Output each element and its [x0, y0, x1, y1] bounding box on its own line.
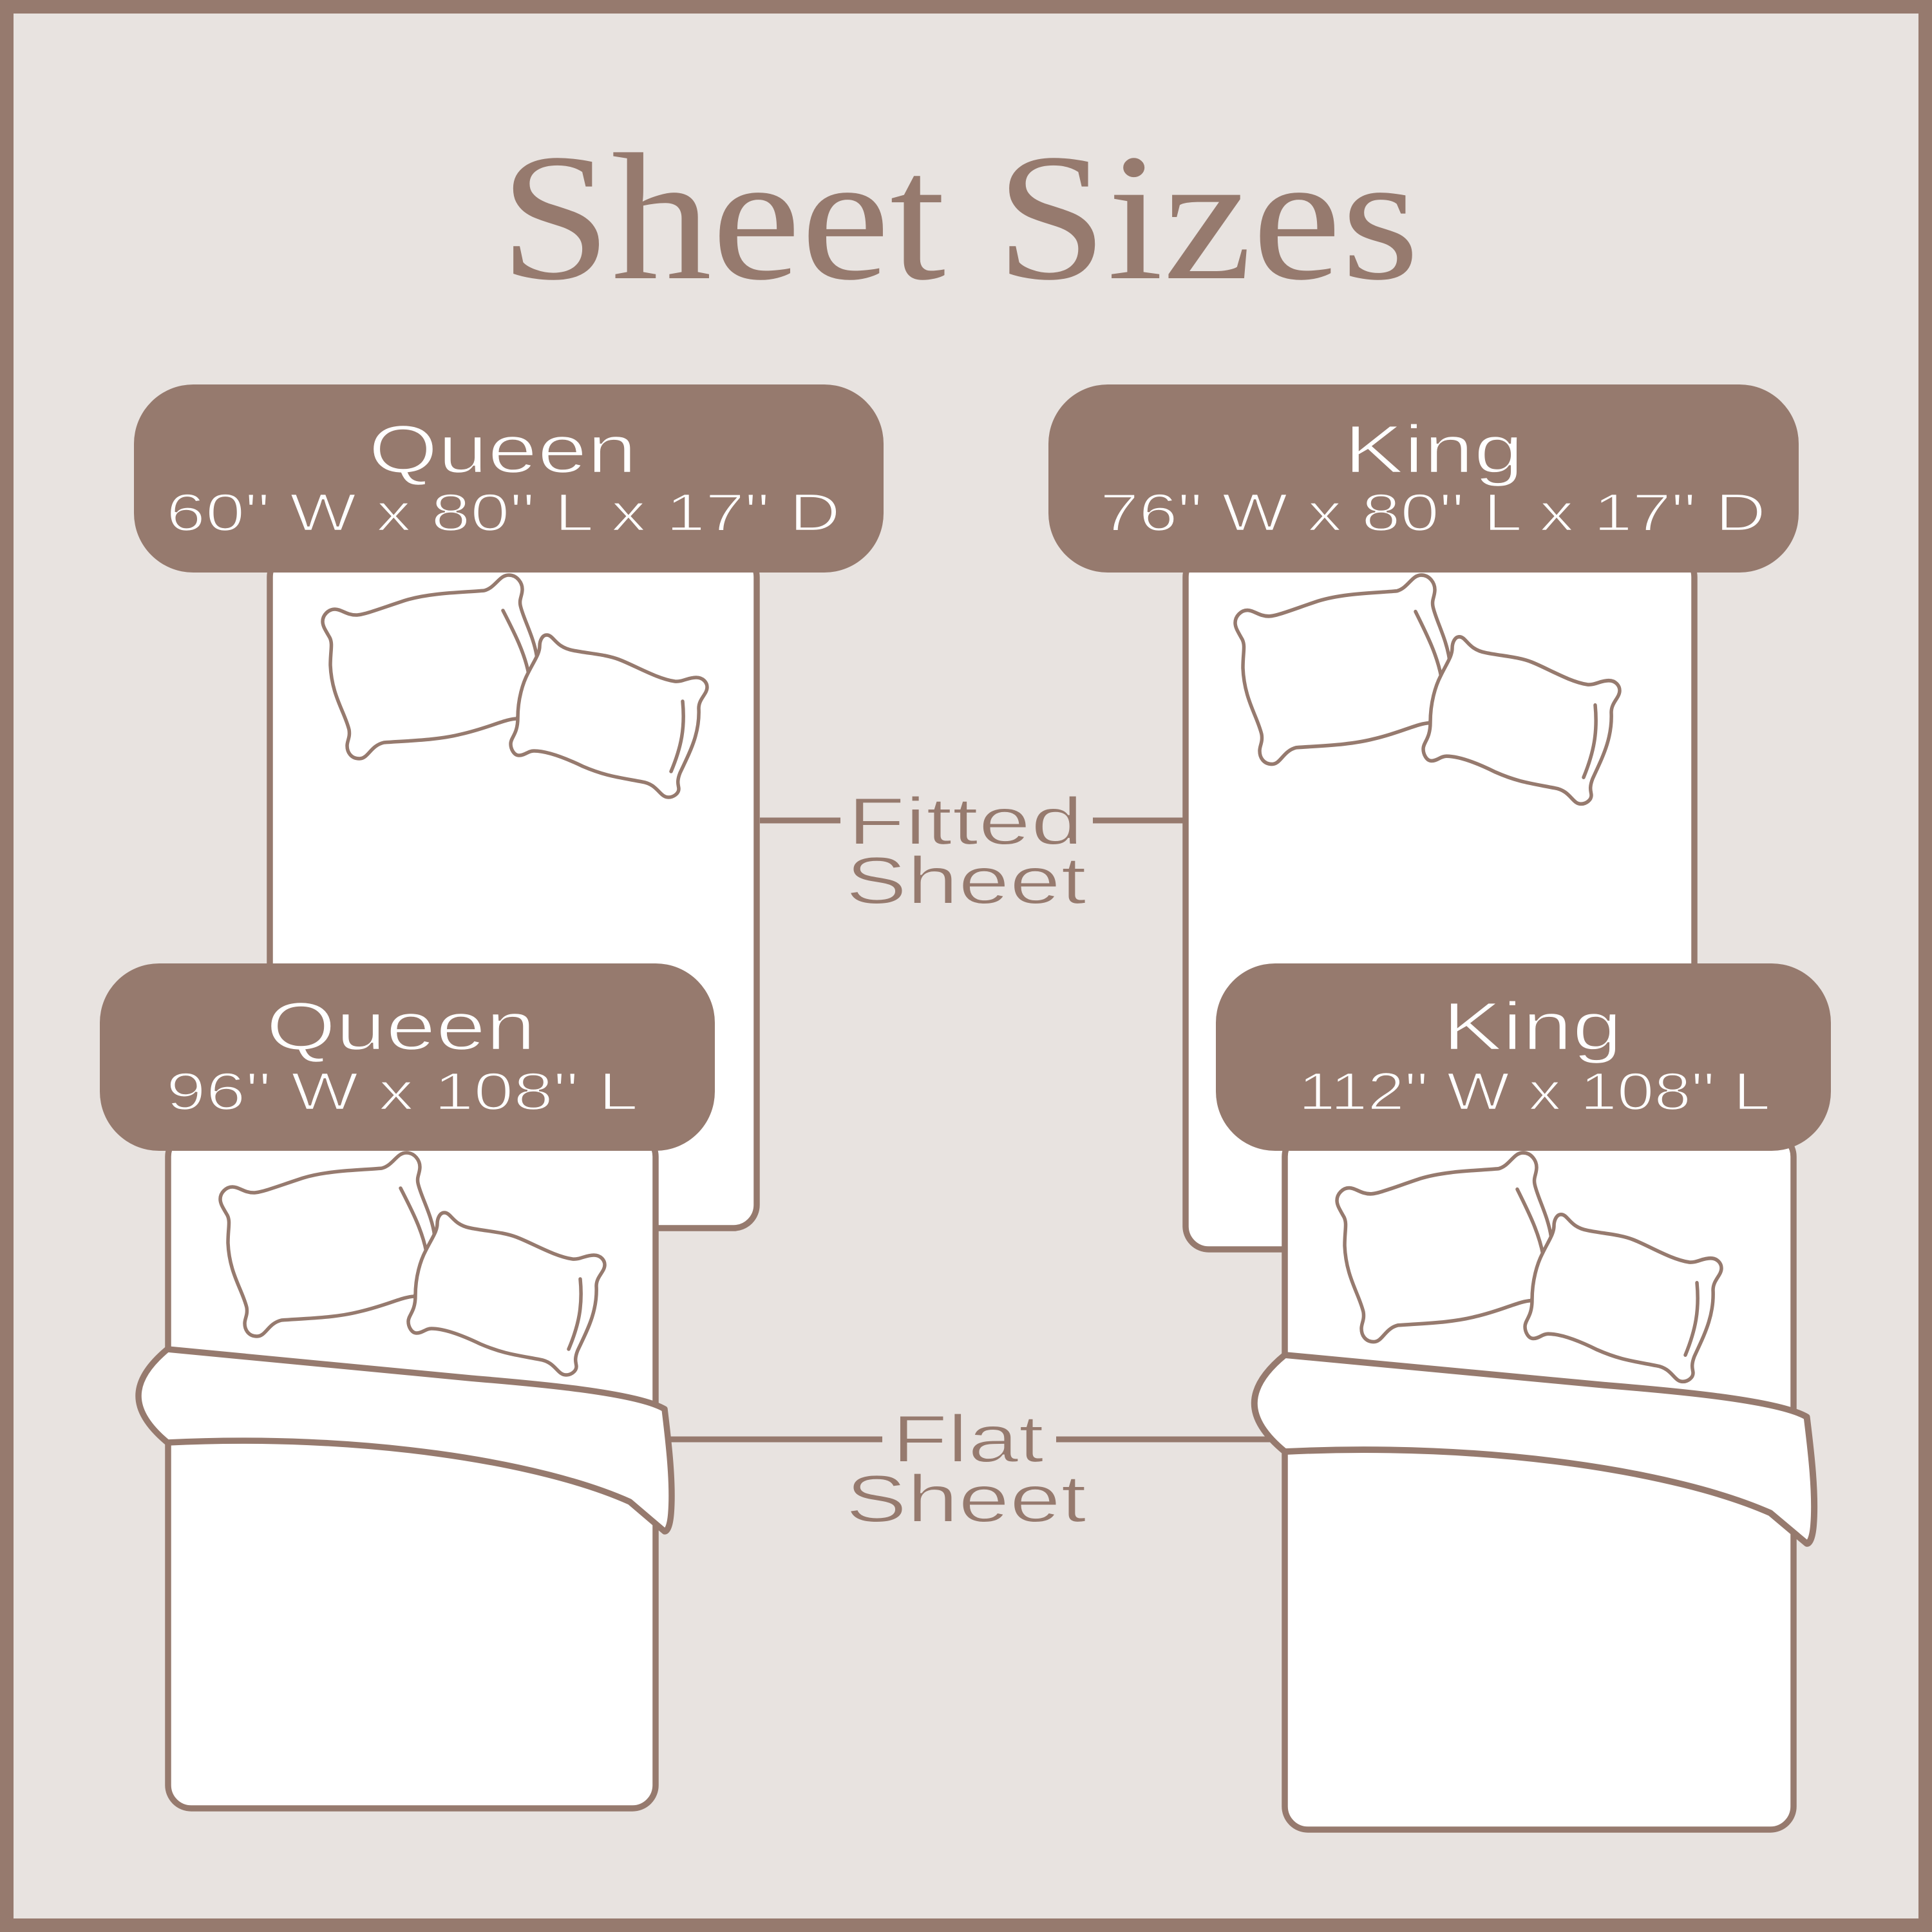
label: fitted sheet [846, 784, 1086, 918]
header: king flat: 112" W x 108" L [1298, 1061, 1770, 1121]
icon: pillows, queen fitted [323, 575, 707, 797]
panel: king fitted sheet [1048, 384, 1799, 1249]
header: queen flat: 96" W x 108" L [166, 1061, 638, 1121]
header: king flat: King [1443, 989, 1622, 1065]
header: queen fitted: 60" W x 80" L x 17" D [166, 482, 840, 542]
header: king fitted: 76" W x 80" L x 17" D [1100, 482, 1766, 542]
header: queen fitted: Queen [368, 412, 637, 488]
bed: queen fitted [270, 554, 757, 1228]
panel: queen fitted sheet [134, 384, 884, 1228]
header: queen flat [100, 963, 715, 1151]
connector: fitted sheet lines [760, 818, 1185, 823]
label: flat sheet: Flat [892, 1402, 1044, 1477]
header: king fitted: King [1344, 412, 1524, 488]
sheet fold: queen flat [138, 1349, 672, 1531]
icon: pillows, king flat [1337, 1153, 1721, 1381]
label: flat sheet [846, 1402, 1086, 1537]
title: Sheet Sizes [500, 117, 1419, 317]
label: flat sheet: Sheet [846, 1462, 1086, 1537]
header: king fitted [1048, 384, 1799, 573]
label: fitted sheet: Fitted [848, 784, 1083, 859]
panel: king flat sheet [1216, 963, 1831, 1830]
header: king flat [1216, 963, 1831, 1151]
label: fitted sheet: Sheet [846, 844, 1086, 918]
bed: king flat [1285, 1133, 1794, 1830]
sheet fold: king flat [1255, 1355, 1814, 1544]
header: queen flat: Queen [266, 989, 536, 1065]
panel: queen flat sheet [100, 963, 715, 1808]
bed: king fitted [1186, 554, 1694, 1249]
connector: flat sheet lines [670, 1436, 1272, 1443]
bed: queen flat [168, 1133, 656, 1808]
icon: pillows, king fitted [1235, 575, 1620, 804]
icon: pillows, queen flat [220, 1153, 605, 1375]
header: queen fitted [134, 384, 884, 573]
